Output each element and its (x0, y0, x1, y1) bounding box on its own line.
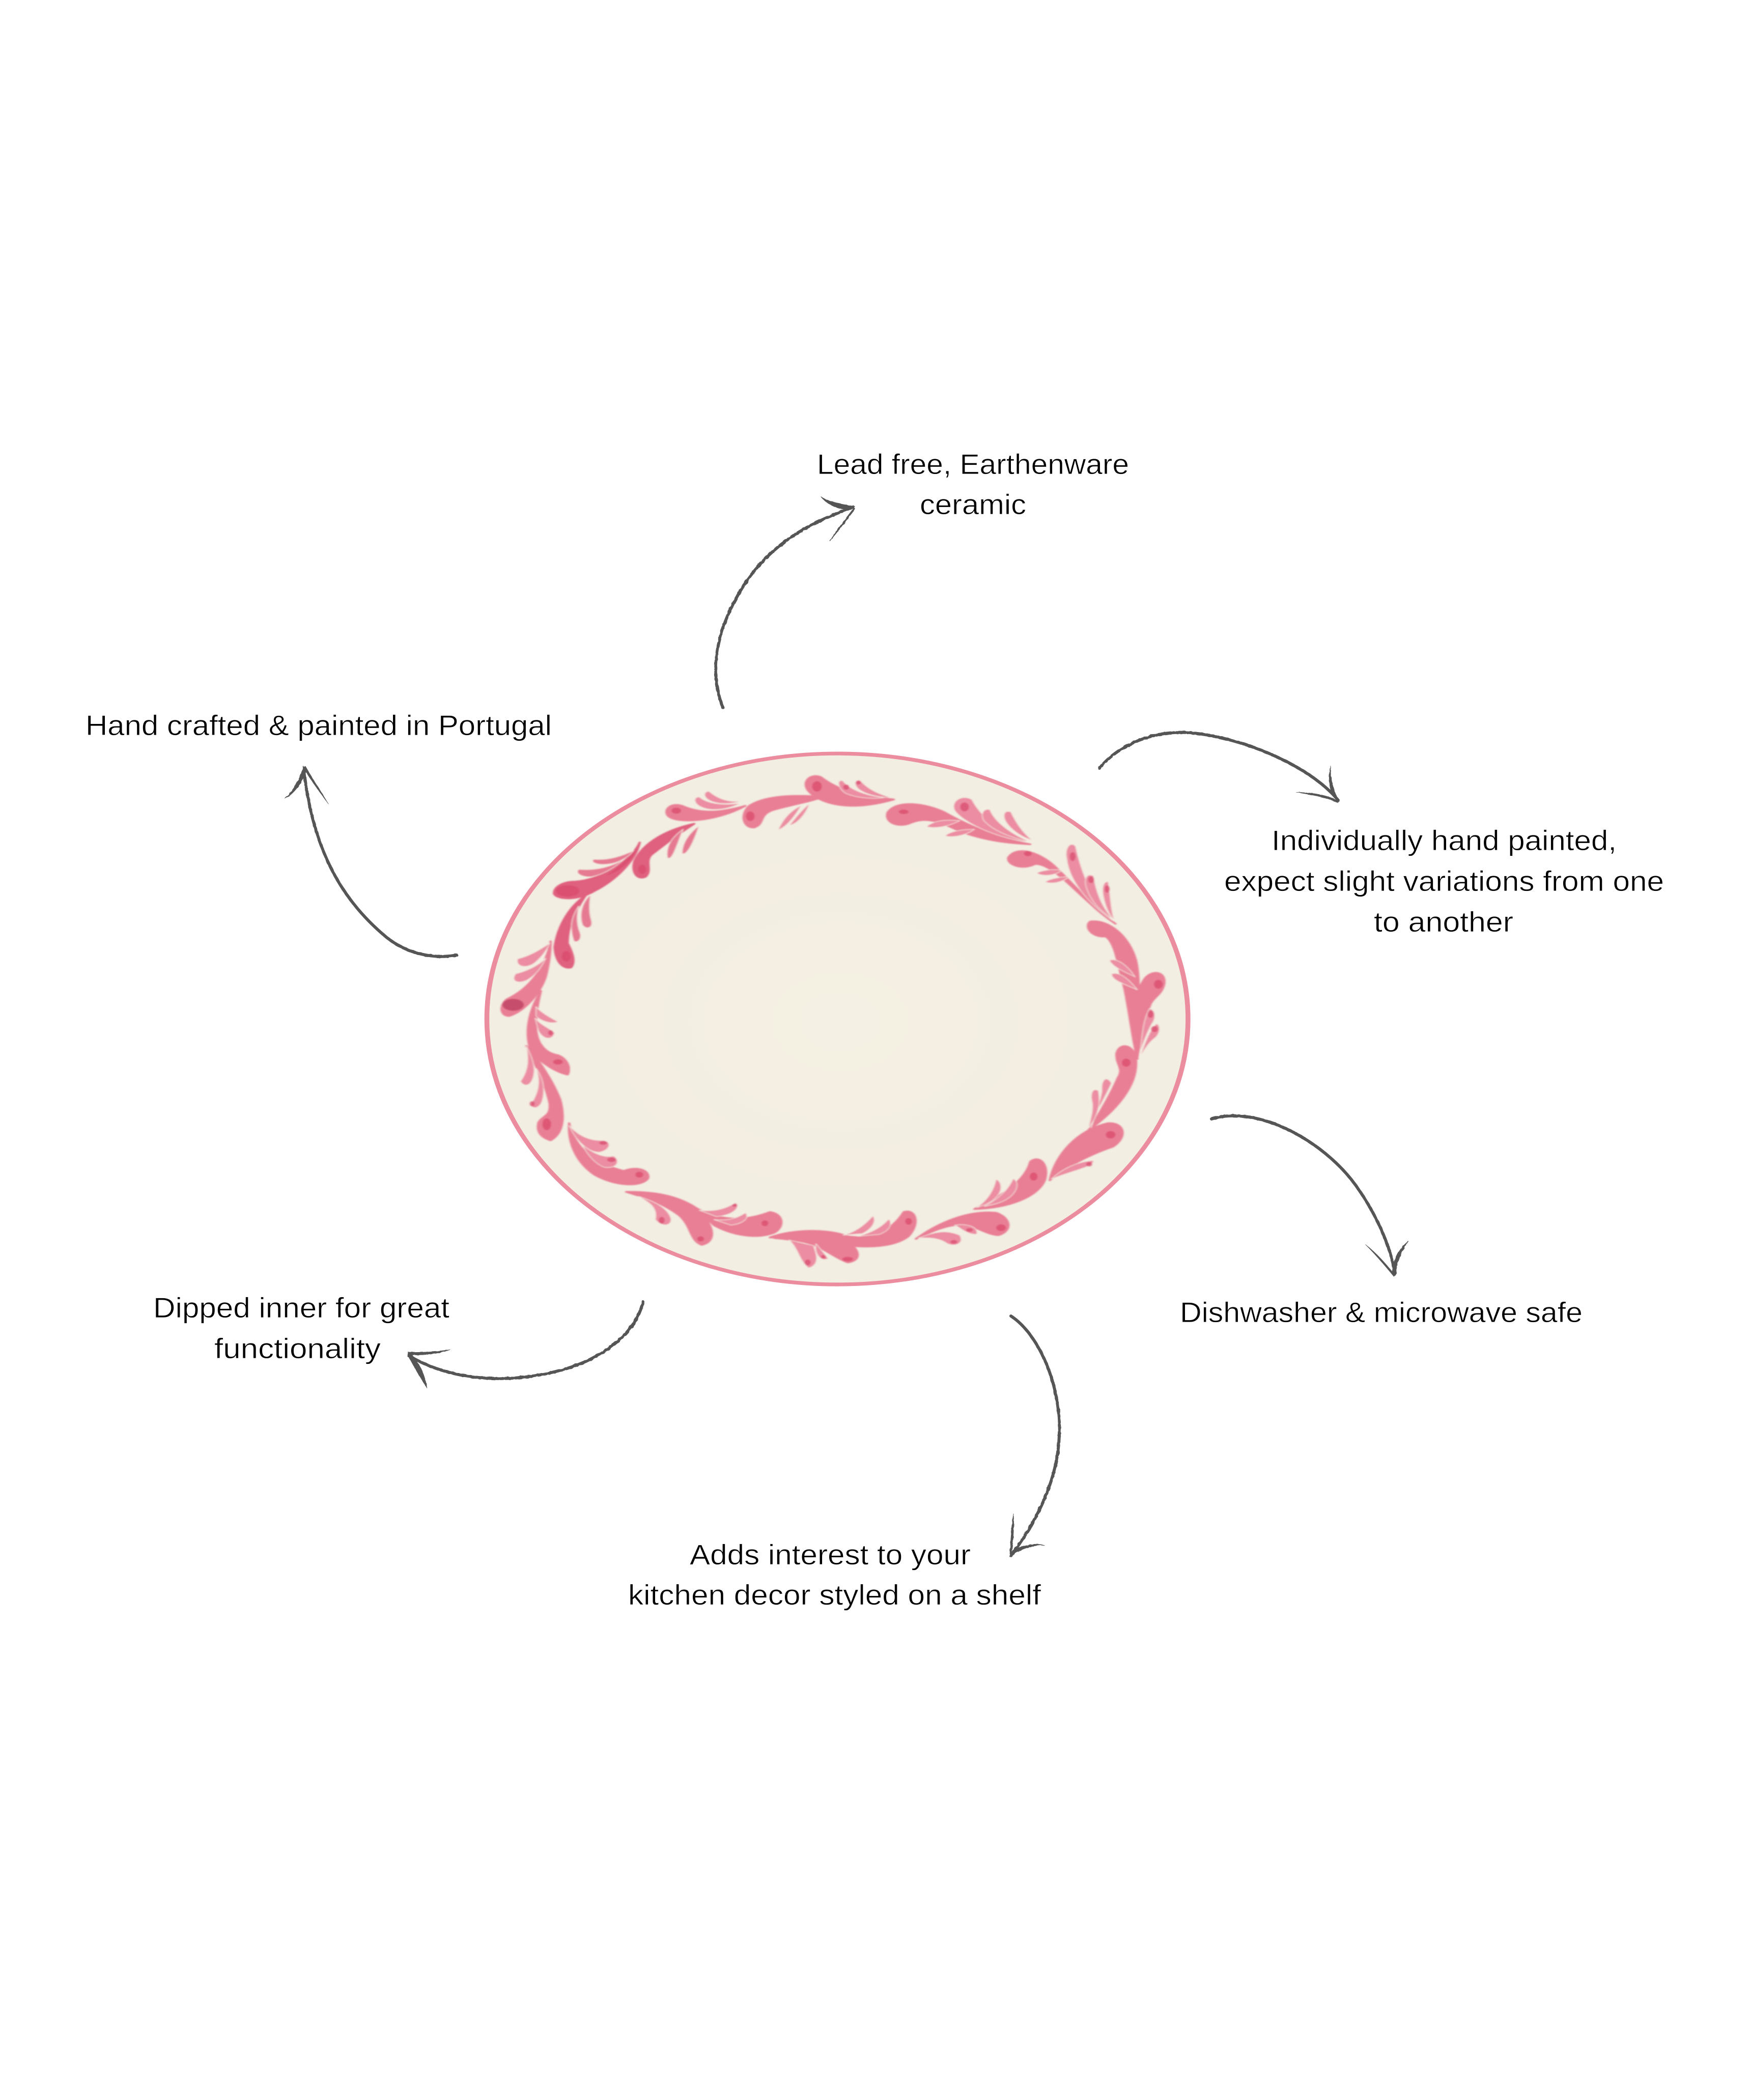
spray: left upper stem (554, 894, 592, 968)
spray: bottom left (626, 1192, 781, 1245)
plate illustration (487, 753, 1188, 1284)
label: dipped inner (153, 1292, 449, 1364)
label: individually hand painted: expect slight variations from one (1224, 865, 1664, 897)
label: individually hand painted (1224, 824, 1664, 938)
arrow: to lead free label (716, 496, 855, 708)
spray: upper left crest (666, 791, 745, 821)
spray: upper left dark leaf (554, 843, 640, 899)
label: hand crafted: Hand crafted & painted in Portugal (86, 709, 552, 741)
label: dipped inner: functionality (214, 1332, 381, 1364)
arrow: to hand crafted label (285, 766, 457, 957)
painted scroll garland (501, 776, 1165, 1268)
spray: top right (887, 798, 1033, 844)
label: lead free: Lead free, Earthenware (817, 448, 1129, 480)
spray: lower right leaf (1050, 1123, 1122, 1180)
spray: lower left (569, 1123, 648, 1184)
spray: top centre (806, 776, 894, 806)
label: individually hand painted: Individually hand painted, (1272, 824, 1617, 856)
arrow: to dishwasher label (1211, 1116, 1408, 1276)
arrow: to dipped inner label (408, 1302, 643, 1388)
arrow: to individually hand painted label (1099, 733, 1339, 803)
dipped inner well (598, 846, 1083, 1197)
spray: upper left stem (633, 824, 699, 878)
plate body and pink rim (487, 753, 1188, 1284)
spray: bottom right low (916, 1212, 1008, 1245)
label: kitchen decor: Adds interest to your (690, 1538, 971, 1571)
spray: right side (1088, 921, 1165, 1059)
spray: lower right stem (1089, 1046, 1136, 1130)
spray: bottom right (974, 1159, 1046, 1209)
label: kitchen decor: kitchen decor styled on a shelf (628, 1579, 1041, 1611)
label: dipped inner: Dipped inner for great (153, 1292, 449, 1324)
spray: left edge leaf (501, 941, 551, 1016)
spray: upper right (1008, 845, 1115, 924)
label: lead free (817, 448, 1129, 520)
label: kitchen decor (628, 1538, 1041, 1611)
label: lead free: ceramic (920, 488, 1026, 520)
spray: bottom centre (770, 1212, 916, 1268)
label: individually hand painted: to another (1374, 906, 1513, 938)
label: dishwasher: Dishwasher & microwave safe (1180, 1296, 1583, 1328)
spray: left lower stem (520, 991, 569, 1140)
spray: top centre left (744, 796, 823, 830)
arrow: to kitchen decor label (1010, 1316, 1059, 1557)
